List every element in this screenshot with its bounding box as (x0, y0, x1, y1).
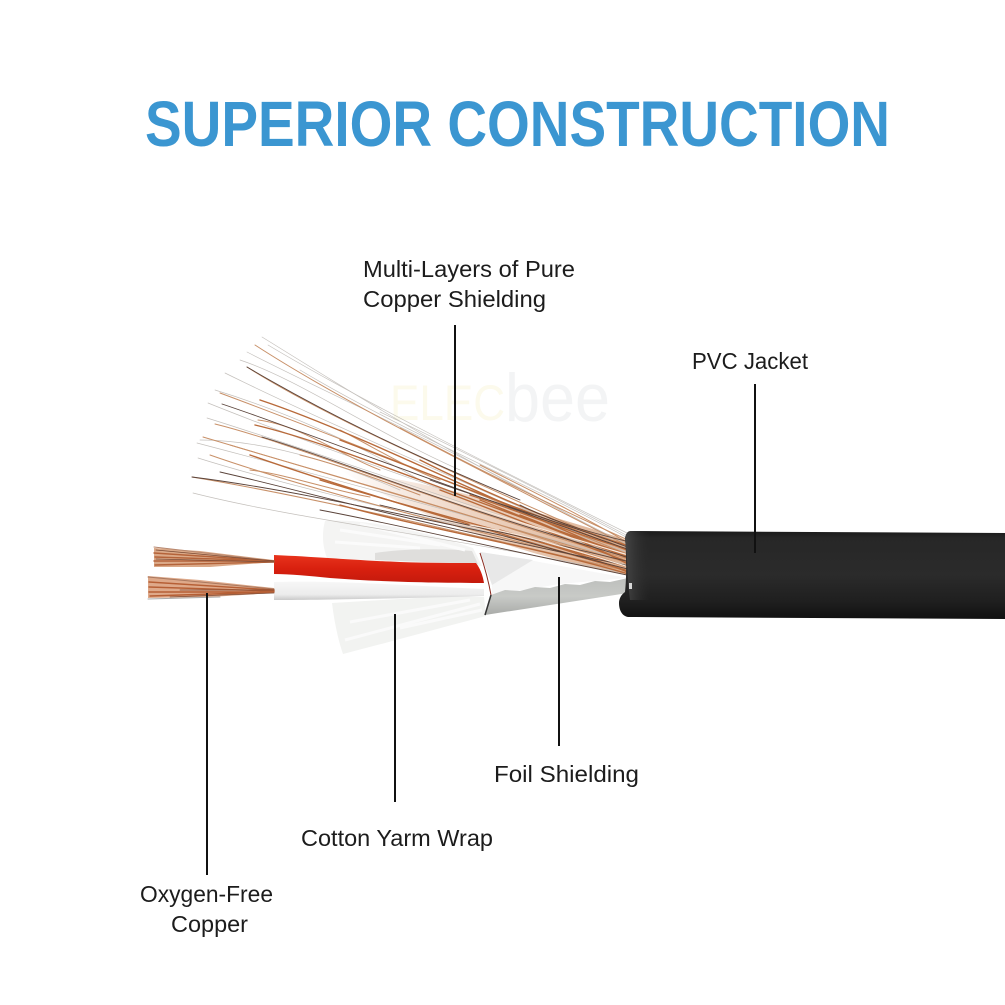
leader line: copper shielding (454, 325, 456, 496)
watermark: bee (505, 360, 610, 436)
white insulated conductor (274, 582, 484, 600)
label: multi-layers of pure copper shielding (363, 256, 575, 312)
watermark: ELEC (390, 375, 505, 431)
cotton yarn wrap: lower tuft (332, 596, 486, 654)
label: multi-layers of pure copper shielding: Multi-Layers of Pure (363, 256, 575, 282)
leader line: oxygen-free copper (206, 593, 208, 875)
oxygen-free copper: upper strands (154, 547, 274, 567)
label: multi-layers of pure copper shielding: Copper Shielding (363, 286, 546, 312)
label: PVC jacket: PVC Jacket (692, 348, 809, 374)
label: cotton yarm wrap: Cotton Yarm Wrap (301, 825, 493, 851)
multi-layer copper shielding strands (192, 337, 632, 576)
title: SUPERIOR CONSTRUCTION (145, 88, 890, 160)
red insulated conductor (274, 555, 484, 583)
label: foil shielding: Foil Shielding (494, 761, 639, 787)
label: oxygen-free copper: Oxygen-Free (140, 881, 273, 907)
cotton yarn wrap: upper tuft (323, 521, 482, 566)
oxygen-free copper: lower strands (148, 576, 274, 599)
leader line: PVC jacket (754, 384, 756, 553)
foil shielding (480, 552, 628, 615)
PVC jacket cable (619, 531, 1005, 619)
watermark (390, 360, 610, 436)
leader line: foil shielding (558, 577, 560, 746)
leader line: cotton yarn wrap (394, 614, 396, 802)
label: oxygen-free copper: Copper (171, 911, 248, 937)
label: oxygen-free copper (140, 881, 273, 937)
